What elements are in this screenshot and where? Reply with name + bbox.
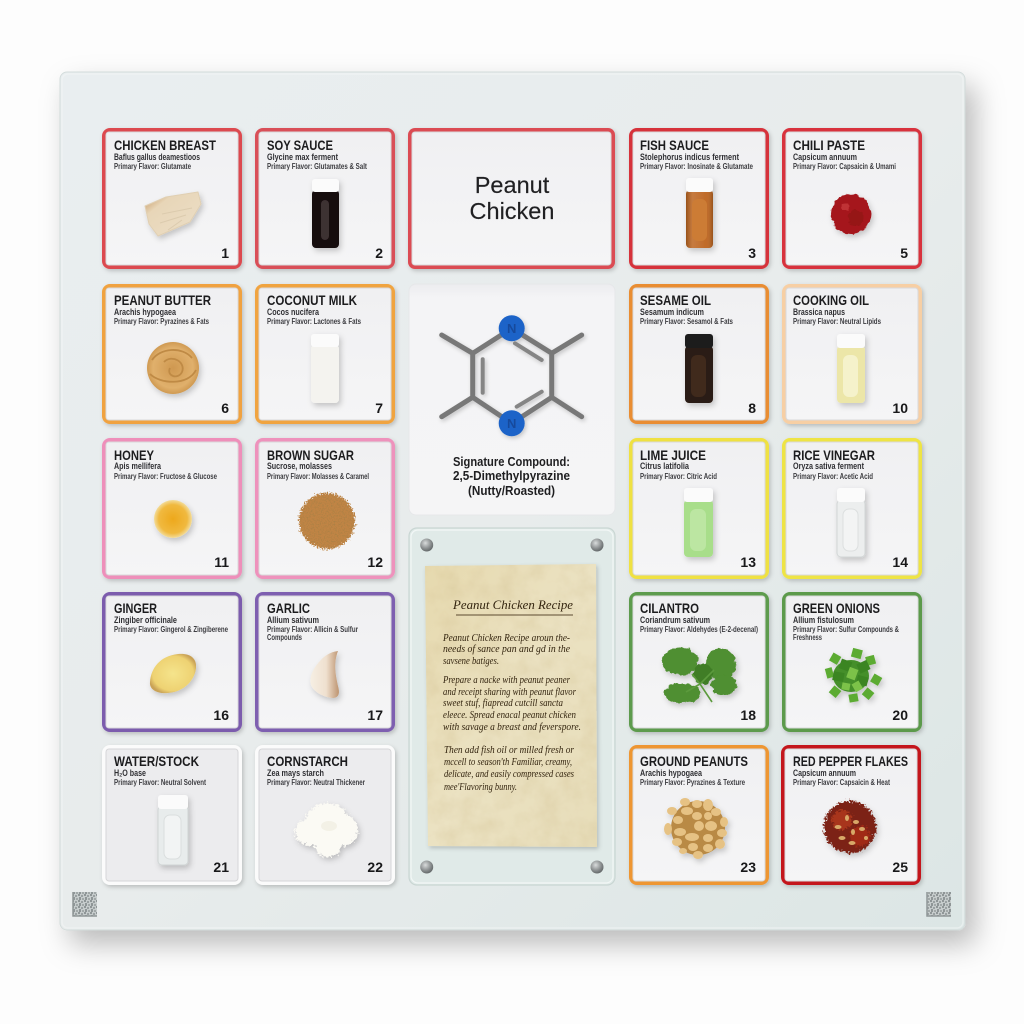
icon: cooking oil vial bbox=[837, 334, 865, 403]
chart: pyrazine molecule bbox=[442, 315, 582, 436]
panel: cooking oil bbox=[782, 284, 922, 424]
icon: water vial bbox=[158, 795, 188, 865]
number: 6 bbox=[221, 400, 229, 416]
primary flavor: Primary Flavor: Neutral Solvent bbox=[114, 778, 206, 787]
compound caption: Signature Compound: bbox=[453, 454, 570, 469]
scientific name: Zea mays starch bbox=[267, 768, 324, 778]
icon: garlic clove bbox=[310, 651, 339, 698]
recipe body: Then add fish oil or milled fresh or bbox=[444, 745, 574, 756]
primary flavor: Primary Flavor: Glutamate bbox=[114, 162, 191, 171]
panel: red pepper flakes bbox=[781, 745, 921, 885]
primary flavor: Primary Flavor: Gingerol & Zingiberene bbox=[114, 625, 228, 634]
icon: fish sauce vial bbox=[686, 178, 713, 248]
heading: GARLIC bbox=[267, 600, 310, 616]
recipe body bbox=[442, 633, 581, 793]
heading: CILANTRO bbox=[640, 600, 699, 616]
panel: peanut butter bbox=[102, 284, 242, 424]
number: 18 bbox=[740, 707, 756, 723]
icon: lime juice vial bbox=[684, 488, 713, 557]
primary flavor: Primary Flavor: Neutral Lipids bbox=[793, 317, 881, 326]
scientific name: Allium fistulosum bbox=[793, 615, 854, 625]
heading: WATER/STOCK bbox=[114, 753, 199, 769]
recipe body: Prepare a nacke with peanut peaner bbox=[442, 675, 570, 686]
scientific name: Baflus gallus deamestioos bbox=[114, 152, 200, 162]
icon: coconut milk vial bbox=[311, 334, 339, 403]
number: 7 bbox=[375, 400, 383, 416]
heading: HONEY bbox=[114, 447, 155, 463]
compound caption: (Nutty/Roasted) bbox=[468, 483, 555, 498]
heading: BROWN SUGAR bbox=[267, 447, 354, 463]
primary flavor: Primary Flavor: Pyrazines & Fats bbox=[114, 317, 209, 326]
panel: green onions bbox=[782, 592, 922, 732]
number: 2 bbox=[375, 245, 383, 261]
scientific name: Arachis hypogaea bbox=[114, 307, 177, 317]
panel: ground peanuts bbox=[629, 745, 769, 885]
parchment bbox=[425, 564, 597, 847]
recipe body: Peanut Chicken Recipe aroun the- bbox=[442, 633, 570, 644]
number: 25 bbox=[892, 859, 908, 875]
panel: sesame oil bbox=[629, 284, 769, 424]
panel: fish sauce bbox=[629, 128, 769, 269]
panel: peanut chicken recipe bbox=[409, 528, 615, 885]
number: 14 bbox=[892, 554, 908, 570]
chart: pyrazine molecule: N bbox=[507, 416, 516, 431]
number: 17 bbox=[367, 707, 383, 723]
heading: CORNSTARCH bbox=[267, 753, 348, 769]
recipe heading: Peanut Chicken Recipe bbox=[452, 597, 573, 612]
number: 5 bbox=[900, 245, 908, 261]
heading: COCONUT MILK bbox=[267, 292, 357, 308]
primary flavor: Compounds bbox=[267, 633, 302, 642]
recipe body: mee'Flavoring bunny. bbox=[444, 782, 517, 793]
recipe body: and receipt sharing with peanut flavor bbox=[443, 687, 576, 698]
recipe body: eleece. Spread enacal peanut chicken bbox=[443, 710, 576, 721]
icon: rice vinegar vial bbox=[837, 488, 865, 557]
icon: soy sauce vial bbox=[312, 179, 339, 248]
number: 11 bbox=[214, 554, 229, 570]
icon: data matrix right bbox=[927, 892, 951, 916]
number: 8 bbox=[748, 400, 756, 416]
scientific name: Sucrose, molasses bbox=[267, 461, 332, 471]
primary flavor: Freshness bbox=[793, 633, 822, 642]
compound caption bbox=[453, 454, 570, 498]
heading: SESAME OIL bbox=[640, 292, 711, 308]
recipe body: mccell to season'th Familiar, creamy, bbox=[444, 757, 572, 768]
scientific name: Brassica napus bbox=[793, 307, 845, 317]
heading: RED PEPPER FLAKES bbox=[793, 753, 908, 769]
panel: rice vinegar bbox=[782, 438, 922, 579]
primary flavor bbox=[267, 625, 358, 642]
primary flavor: Primary Flavor: Capsaicin & Umami bbox=[793, 162, 896, 171]
primary flavor: Primary Flavor: Citric Acid bbox=[640, 472, 717, 481]
primary flavor: Primary Flavor: Sesamol & Fats bbox=[640, 317, 733, 326]
icon: chili paste bbox=[831, 194, 871, 234]
icon: cornstarch pile bbox=[295, 803, 358, 857]
heading: GREEN ONIONS bbox=[793, 600, 880, 616]
recipe body: with savage a breast and feverspore. bbox=[443, 722, 581, 733]
primary flavor: Primary Flavor: Acetic Acid bbox=[793, 472, 873, 481]
title text bbox=[470, 172, 554, 224]
primary flavor bbox=[793, 625, 899, 642]
number: 23 bbox=[740, 859, 756, 875]
scientific name: Arachis hypogaea bbox=[640, 768, 703, 778]
scientific name: Coriandrum sativum bbox=[640, 615, 710, 625]
icon: honey drop bbox=[154, 500, 192, 538]
panel: water/stock bbox=[102, 745, 242, 885]
scientific name: Apis mellifera bbox=[114, 461, 162, 471]
primary flavor: Primary Flavor: Capsaicin & Heat bbox=[793, 778, 890, 787]
number: 22 bbox=[367, 859, 383, 875]
panel: honey bbox=[102, 438, 242, 579]
panel: chicken breast bbox=[102, 128, 242, 269]
number: 10 bbox=[892, 400, 908, 416]
heading: RICE VINEGAR bbox=[793, 447, 875, 463]
icon: peanut butter swirl bbox=[147, 342, 199, 394]
heading: LIME JUICE bbox=[640, 447, 706, 463]
icon: chicken bbox=[145, 192, 201, 236]
panel: brown sugar bbox=[255, 438, 395, 579]
icon: brown sugar pile bbox=[299, 493, 355, 549]
icon: sesame oil vial bbox=[685, 334, 713, 403]
panel: molecule bbox=[409, 284, 615, 515]
panel: soy sauce bbox=[255, 128, 395, 269]
primary flavor: Primary Flavor: Fructose & Glucose bbox=[114, 472, 217, 481]
scientific name: Allium sativum bbox=[267, 615, 319, 625]
panel: title bbox=[408, 128, 615, 269]
recipe body: delicate, and easily compressed cases bbox=[444, 769, 574, 780]
scientific name: Glycine max ferment bbox=[267, 152, 338, 162]
heading: CHILI PASTE bbox=[793, 137, 865, 153]
scientific name: Capsicum annuum bbox=[793, 768, 856, 778]
scientific name: Cocos nucifera bbox=[267, 307, 320, 317]
primary flavor: Primary Flavor: Inosinate & Glutamate bbox=[640, 162, 753, 171]
number: 1 bbox=[221, 245, 229, 261]
scientific name: Zingiber officinale bbox=[114, 615, 177, 625]
compound caption: 2,5-Dimethylpyrazine bbox=[453, 468, 570, 483]
title text: Peanut bbox=[475, 172, 550, 198]
primary flavor: Primary Flavor: Neutral Thickener bbox=[267, 778, 365, 787]
icon: red pepper flakes bbox=[824, 801, 876, 853]
panel: lime juice bbox=[629, 438, 769, 579]
icon: ginger slice bbox=[150, 654, 196, 693]
icon: ground peanuts bbox=[664, 798, 728, 859]
primary flavor: Primary Flavor: Aldehydes (E-2-decenal) bbox=[640, 625, 758, 634]
primary flavor: Primary Flavor: Allicin & Sulfur bbox=[267, 625, 358, 634]
panel: garlic bbox=[255, 592, 395, 732]
heading: GINGER bbox=[114, 600, 157, 616]
heading: GROUND PEANUTS bbox=[640, 753, 748, 769]
panel: coconut milk bbox=[255, 284, 395, 424]
title text: Chicken bbox=[470, 198, 554, 224]
scientific name: Citrus latifolia bbox=[640, 461, 690, 471]
panel: glass board bbox=[60, 72, 965, 930]
icon: screws bbox=[420, 538, 604, 874]
scientific name: Oryza sativa ferment bbox=[793, 461, 864, 471]
number: 3 bbox=[748, 245, 756, 261]
primary flavor: Primary Flavor: Sulfur Compounds & bbox=[793, 625, 899, 634]
icon: cilantro bbox=[662, 647, 737, 703]
panel: chili paste bbox=[782, 128, 922, 269]
scientific name: Capsicum annuum bbox=[793, 152, 857, 162]
recipe body: needs of sance pan and gd in the bbox=[443, 644, 571, 655]
icon: chopped green onions bbox=[825, 648, 882, 703]
scientific name: Sesamum indicum bbox=[640, 307, 704, 317]
heading: PEANUT BUTTER bbox=[114, 292, 211, 308]
panel: ginger bbox=[102, 592, 242, 732]
number: 20 bbox=[892, 707, 908, 723]
number: 12 bbox=[367, 554, 383, 570]
heading: SOY SAUCE bbox=[267, 137, 333, 153]
primary flavor: Primary Flavor: Glutamates & Salt bbox=[267, 162, 367, 171]
primary flavor: Primary Flavor: Lactones & Fats bbox=[267, 317, 361, 326]
scientific name: H₂O base bbox=[114, 768, 146, 778]
heading: CHICKEN BREAST bbox=[114, 137, 216, 153]
number: 16 bbox=[213, 707, 229, 723]
icon: data matrix left bbox=[73, 892, 97, 916]
panel: cilantro bbox=[629, 592, 769, 732]
primary flavor: Primary Flavor: Molasses & Caramel bbox=[267, 472, 369, 481]
number: 13 bbox=[740, 554, 756, 570]
panel: cornstarch bbox=[255, 745, 395, 885]
recipe body: sweet stuf, fiapread cutcill sancta bbox=[443, 698, 563, 709]
primary flavor: Primary Flavor: Pyrazines & Texture bbox=[640, 778, 745, 787]
recipe body: savsene batiges. bbox=[443, 656, 499, 667]
chart: pyrazine molecule: N bbox=[507, 321, 516, 336]
scientific name: Stolephorus indicus ferment bbox=[640, 152, 739, 162]
heading: FISH SAUCE bbox=[640, 137, 709, 153]
number: 21 bbox=[213, 859, 229, 875]
heading: COOKING OIL bbox=[793, 292, 869, 308]
